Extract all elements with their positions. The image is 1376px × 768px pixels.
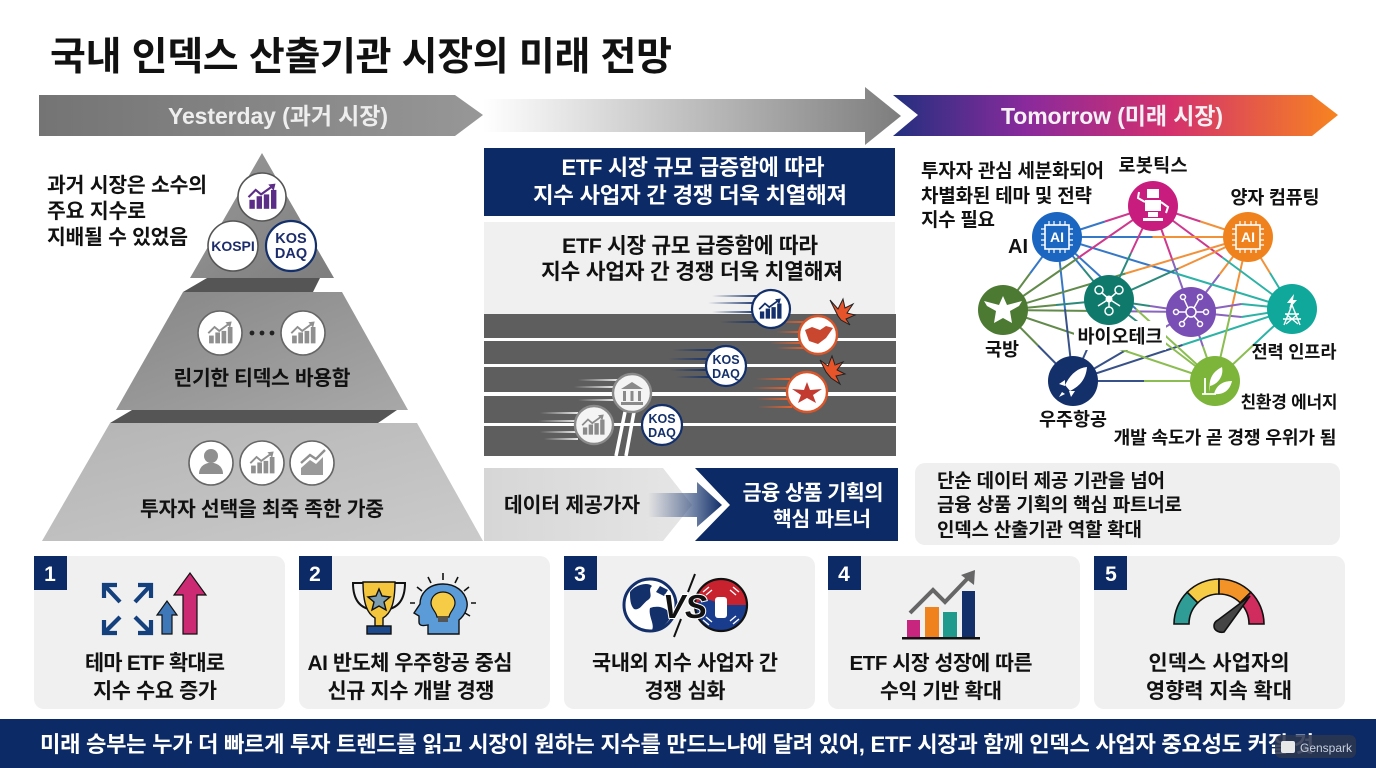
- icon: versus: VS: [663, 588, 707, 625]
- icon: burst lower: [820, 356, 845, 384]
- icon: idea head: [410, 573, 476, 634]
- text: 국내외 지수 사업자 간: [592, 652, 778, 675]
- icon: globe: [624, 579, 676, 631]
- label: bottom tier: 투자자 선택을 최죽 족한 가중: [140, 498, 384, 521]
- network: themes: [978, 155, 1338, 448]
- network labels: 바이오테크: [1078, 326, 1162, 347]
- card 5: influence: [1094, 556, 1345, 709]
- network labels: 우주항공: [1039, 409, 1107, 430]
- text: ETF 시장 성장에 따른: [850, 652, 1032, 675]
- node: drone biotech: [1084, 275, 1134, 325]
- icon: area chart: [290, 441, 334, 485]
- icon: Korea flag: [694, 578, 748, 632]
- label: middle tier: 린기한 티덱스 바용함: [174, 367, 351, 390]
- racer: defense star: [787, 372, 827, 412]
- racer: KOSDAQ mid: KOS: [712, 353, 740, 367]
- racer: gray chart: [575, 406, 613, 444]
- node: AI: AI: [1050, 229, 1064, 245]
- icon: up arrows: [157, 573, 206, 634]
- network labels: 양자 컴퓨팅: [1230, 187, 1320, 208]
- node: green energy: [1190, 356, 1240, 406]
- number badge 1: 1: [44, 563, 56, 586]
- icon: growth bars: [902, 570, 980, 640]
- speed lines: [538, 295, 806, 440]
- panel: competition race: [484, 222, 896, 456]
- arrow: yesterday header: Yesterday (과거 시장): [168, 103, 388, 129]
- network labels: [985, 155, 1338, 448]
- number badge 5: [1094, 556, 1127, 590]
- text: past market note: 주요 지수로: [47, 200, 146, 223]
- number badge 2: [299, 556, 332, 590]
- text: 경쟁 심화: [644, 680, 726, 703]
- panel: past market pyramid: [42, 153, 483, 541]
- icon: gauge: [1174, 579, 1264, 632]
- chevron: data provider: 데이터 제공가자: [504, 494, 640, 517]
- text: 테마 ETF 확대로: [85, 652, 225, 675]
- race track: [484, 314, 896, 456]
- pyramid bottom tier: [42, 423, 483, 541]
- icon: index chart: [238, 173, 286, 221]
- number badge 4: 4: [838, 563, 850, 586]
- arrow: tomorrow header: Tomorrow (미래 시장): [1001, 103, 1223, 129]
- callout: role expansion: 인덱스 산출기관 역할 확대: [937, 519, 1142, 541]
- banner: competition headline: [484, 148, 895, 216]
- racer: handshake: [799, 316, 837, 354]
- text: past market note: 지배될 수 있었음: [47, 226, 188, 249]
- icon: versus: [663, 574, 707, 637]
- pyramid top tier: [190, 153, 334, 278]
- footer banner: 미래 승부는 누가 더 빠르게 투자 트렌드를 읽고 시장이 원하는 지수를 만드느냐에 달려 있어, ETF 시장과 함께 인덱스 사업자 중요성도 커질 것: [40, 732, 1314, 757]
- banner: competition headline: ETF 시장 규모 급증함에 따라: [562, 155, 824, 180]
- network labels: 국방: [985, 339, 1019, 360]
- ellipsis dots: [250, 331, 274, 335]
- callout: role expansion: [915, 463, 1340, 545]
- network labels: AI: [1008, 236, 1028, 258]
- text: past market note: [47, 174, 207, 249]
- text: [592, 652, 778, 703]
- watermark: [1275, 735, 1356, 758]
- card 2: new index: [299, 556, 550, 709]
- card 3: domestic vs global: [564, 556, 815, 709]
- arrow: transition: [648, 482, 722, 527]
- icon: KOSDAQ: [266, 221, 316, 271]
- text: 인덱스 사업자의: [1148, 652, 1290, 675]
- heading: race: [541, 234, 843, 284]
- callout: role expansion: 금융 상품 기획의 핵심 파트너로: [937, 494, 1182, 516]
- racer: bank: [613, 374, 651, 412]
- node: quantum computing: AI: [1241, 229, 1255, 245]
- footer banner: [0, 719, 1376, 768]
- text: [850, 652, 1032, 703]
- icon: investor: [189, 441, 233, 485]
- block: core partner: 핵심 파트너: [773, 508, 871, 531]
- text: investor interest note: 투자자 관심 세분화되어: [921, 160, 1104, 182]
- node: biotech network: [1166, 287, 1216, 337]
- icon: bar chart: [240, 441, 284, 485]
- arrow: tomorrow header: [893, 95, 1338, 136]
- panel: role transition: [484, 468, 898, 541]
- icon: index chart left: [198, 311, 242, 355]
- number badge 1: [34, 556, 67, 590]
- network labels: 친환경 에너지: [1240, 393, 1338, 412]
- text: 영향력 지속 확대: [1146, 680, 1292, 703]
- node: defense: [978, 285, 1028, 335]
- number badge 5: 5: [1105, 563, 1117, 586]
- block: core partner: [695, 468, 898, 541]
- racer: KOSDAQ mid: DAQ: [712, 367, 740, 381]
- racer: KOSDAQ low: [642, 405, 682, 445]
- block: core partner: 금융 상품 기획의: [742, 482, 884, 505]
- number badge 3: 3: [574, 563, 586, 586]
- racer: navy chart: [752, 290, 790, 328]
- node: robotics: [1128, 181, 1178, 231]
- text: 지수 수요 증가: [93, 680, 217, 703]
- card 4: revenue growth: [828, 556, 1080, 709]
- network edges: [1003, 206, 1292, 381]
- icon: KOSPI: KOSPI: [211, 238, 255, 254]
- racer: KOSDAQ mid: [706, 346, 746, 386]
- heading: race: 지수 사업자 간 경쟁 더욱 치열해져: [541, 260, 843, 284]
- chevron: data provider: [484, 468, 692, 541]
- text: [1146, 652, 1292, 703]
- number badge 2: 2: [309, 563, 321, 586]
- pyramid middle tier: [116, 292, 408, 410]
- icon: index chart right: [281, 311, 325, 355]
- racer: KOSDAQ low: KOS: [648, 412, 676, 426]
- banner: competition headline: 지수 사업자 간 경쟁 더욱 치열해져: [533, 183, 847, 208]
- icon: KOSDAQ: KOS: [275, 231, 307, 247]
- callout: role expansion: 단순 데이터 제공 기관을 넘어: [937, 470, 1165, 492]
- text: investor interest note: 지수 필요: [921, 209, 995, 231]
- label mask: biotech: [1074, 321, 1166, 350]
- text: [85, 652, 225, 703]
- network labels: 전력 인프라: [1252, 342, 1336, 362]
- title: 국내 인덱스 산출기관 시장의 미래 전망: [50, 36, 672, 79]
- network labels: 로봇틱스: [1118, 155, 1188, 176]
- icon: burst top: [830, 299, 855, 325]
- text: AI 반도체 우주항공 중심: [308, 652, 512, 675]
- icon: KOSPI: [208, 221, 258, 271]
- text: investor interest note: [921, 160, 1104, 231]
- number badge 3: [564, 556, 597, 590]
- watermark: Genspark: [1300, 741, 1353, 755]
- racer: KOSDAQ low: DAQ: [648, 426, 676, 440]
- network labels: 개발 속도가 곧 경쟁 우위가 됨: [1114, 427, 1336, 448]
- node: quantum computing: [1223, 212, 1273, 262]
- icon: trophy: [353, 582, 405, 634]
- icon: KOSDAQ: DAQ: [275, 246, 307, 262]
- icon: expansion arrows: [104, 585, 151, 633]
- arrow: yesterday header: [39, 95, 483, 136]
- text: past market note: 과거 시장은 소수의: [47, 174, 207, 197]
- text: 수익 기반 확대: [880, 680, 1002, 703]
- number badge 4: [828, 556, 861, 590]
- text: 신규 지수 개발 경쟁: [328, 680, 494, 703]
- text: investor interest note: 차별화된 테마 및 전략: [921, 185, 1092, 207]
- node: aerospace: [1048, 356, 1098, 406]
- card 1: theme ETF: [34, 556, 285, 709]
- node: AI: [1032, 212, 1082, 262]
- heading: race: ETF 시장 규모 급증함에 따라: [562, 234, 818, 258]
- arrow: transition: [483, 87, 901, 145]
- text: [308, 652, 512, 703]
- node: power infrastructure: [1267, 284, 1317, 334]
